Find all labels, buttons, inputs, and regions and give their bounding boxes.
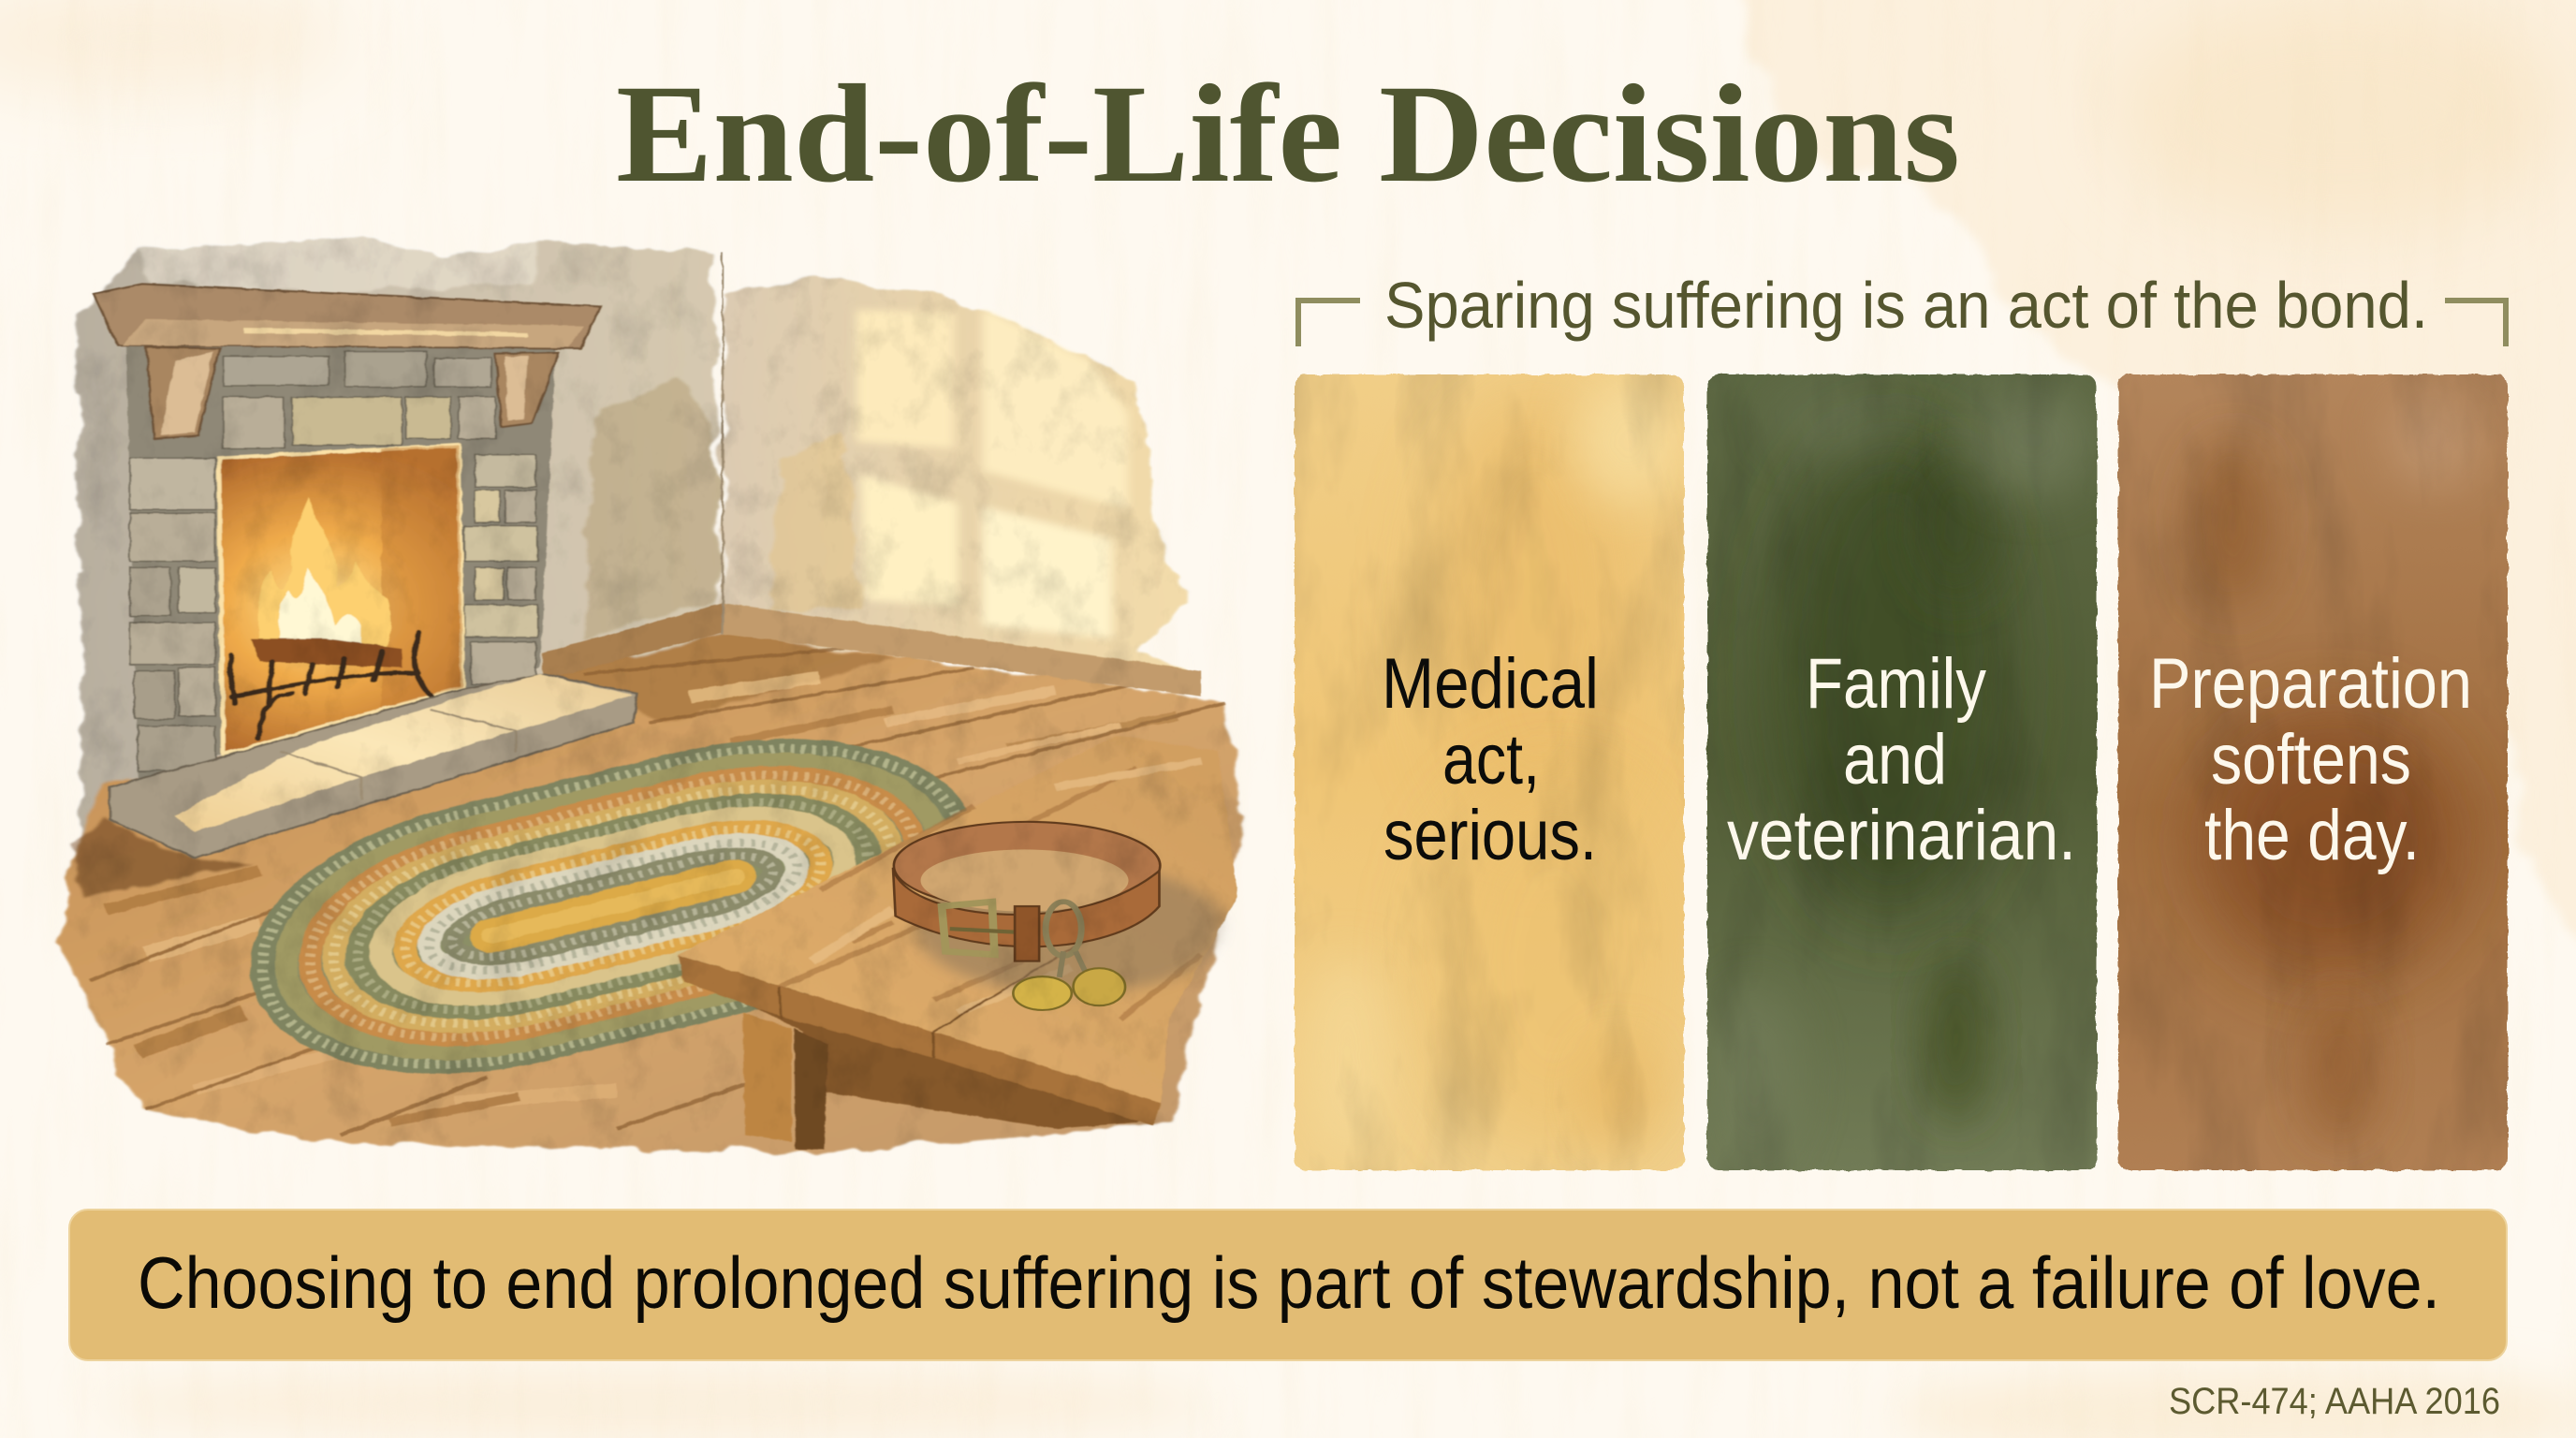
callout banner [69, 1210, 2507, 1360]
card text [2149, 644, 2472, 875]
hearth slab [110, 674, 637, 858]
card text [1727, 644, 2076, 875]
floor planks [89, 648, 1226, 1136]
logs and grate [230, 632, 431, 739]
card text: Medical [1382, 644, 1599, 724]
subtitle bracket: right [2445, 301, 2506, 346]
yellow wash [1295, 374, 1685, 1170]
title: End-of-Life Decisions [616, 56, 1960, 212]
subtitle: Sparing suffering is an act of the bond. [1384, 269, 2428, 342]
card text: serious. [1383, 796, 1597, 875]
card text: the day. [2204, 796, 2420, 875]
green wash [1707, 374, 2097, 1170]
panel: preparation card [2118, 374, 2508, 1170]
baseboard [542, 252, 1202, 697]
mantel [94, 284, 601, 439]
card text: and [1843, 720, 1947, 800]
braided oval rug [222, 705, 1004, 1108]
wooden table [678, 735, 1238, 1150]
card text: Family [1806, 644, 1986, 724]
citation: SCR-474; AAHA 2016 [2169, 1381, 2500, 1422]
flames [258, 497, 391, 654]
firebox [219, 446, 462, 755]
leather collar with tags [893, 822, 1226, 1010]
walls and floor wash [57, 236, 1242, 1154]
window light on wall [856, 306, 1129, 638]
buckle [942, 902, 1015, 955]
panel: medical card [1295, 374, 1685, 1170]
tags [1013, 968, 1125, 1010]
card text: act, [1442, 720, 1540, 800]
subtitle bracket: left [1298, 301, 1360, 346]
brown wash [2118, 374, 2508, 1170]
fireplace [94, 284, 637, 858]
stone surround [125, 345, 556, 784]
panel: watercolor hearth illustration [57, 236, 1242, 1154]
card text: softens [2211, 720, 2411, 800]
card text: veterinarian. [1727, 796, 2076, 875]
panel: family and veterinarian card [1707, 374, 2097, 1170]
card text [1382, 644, 1599, 875]
card text: Preparation [2149, 644, 2472, 724]
